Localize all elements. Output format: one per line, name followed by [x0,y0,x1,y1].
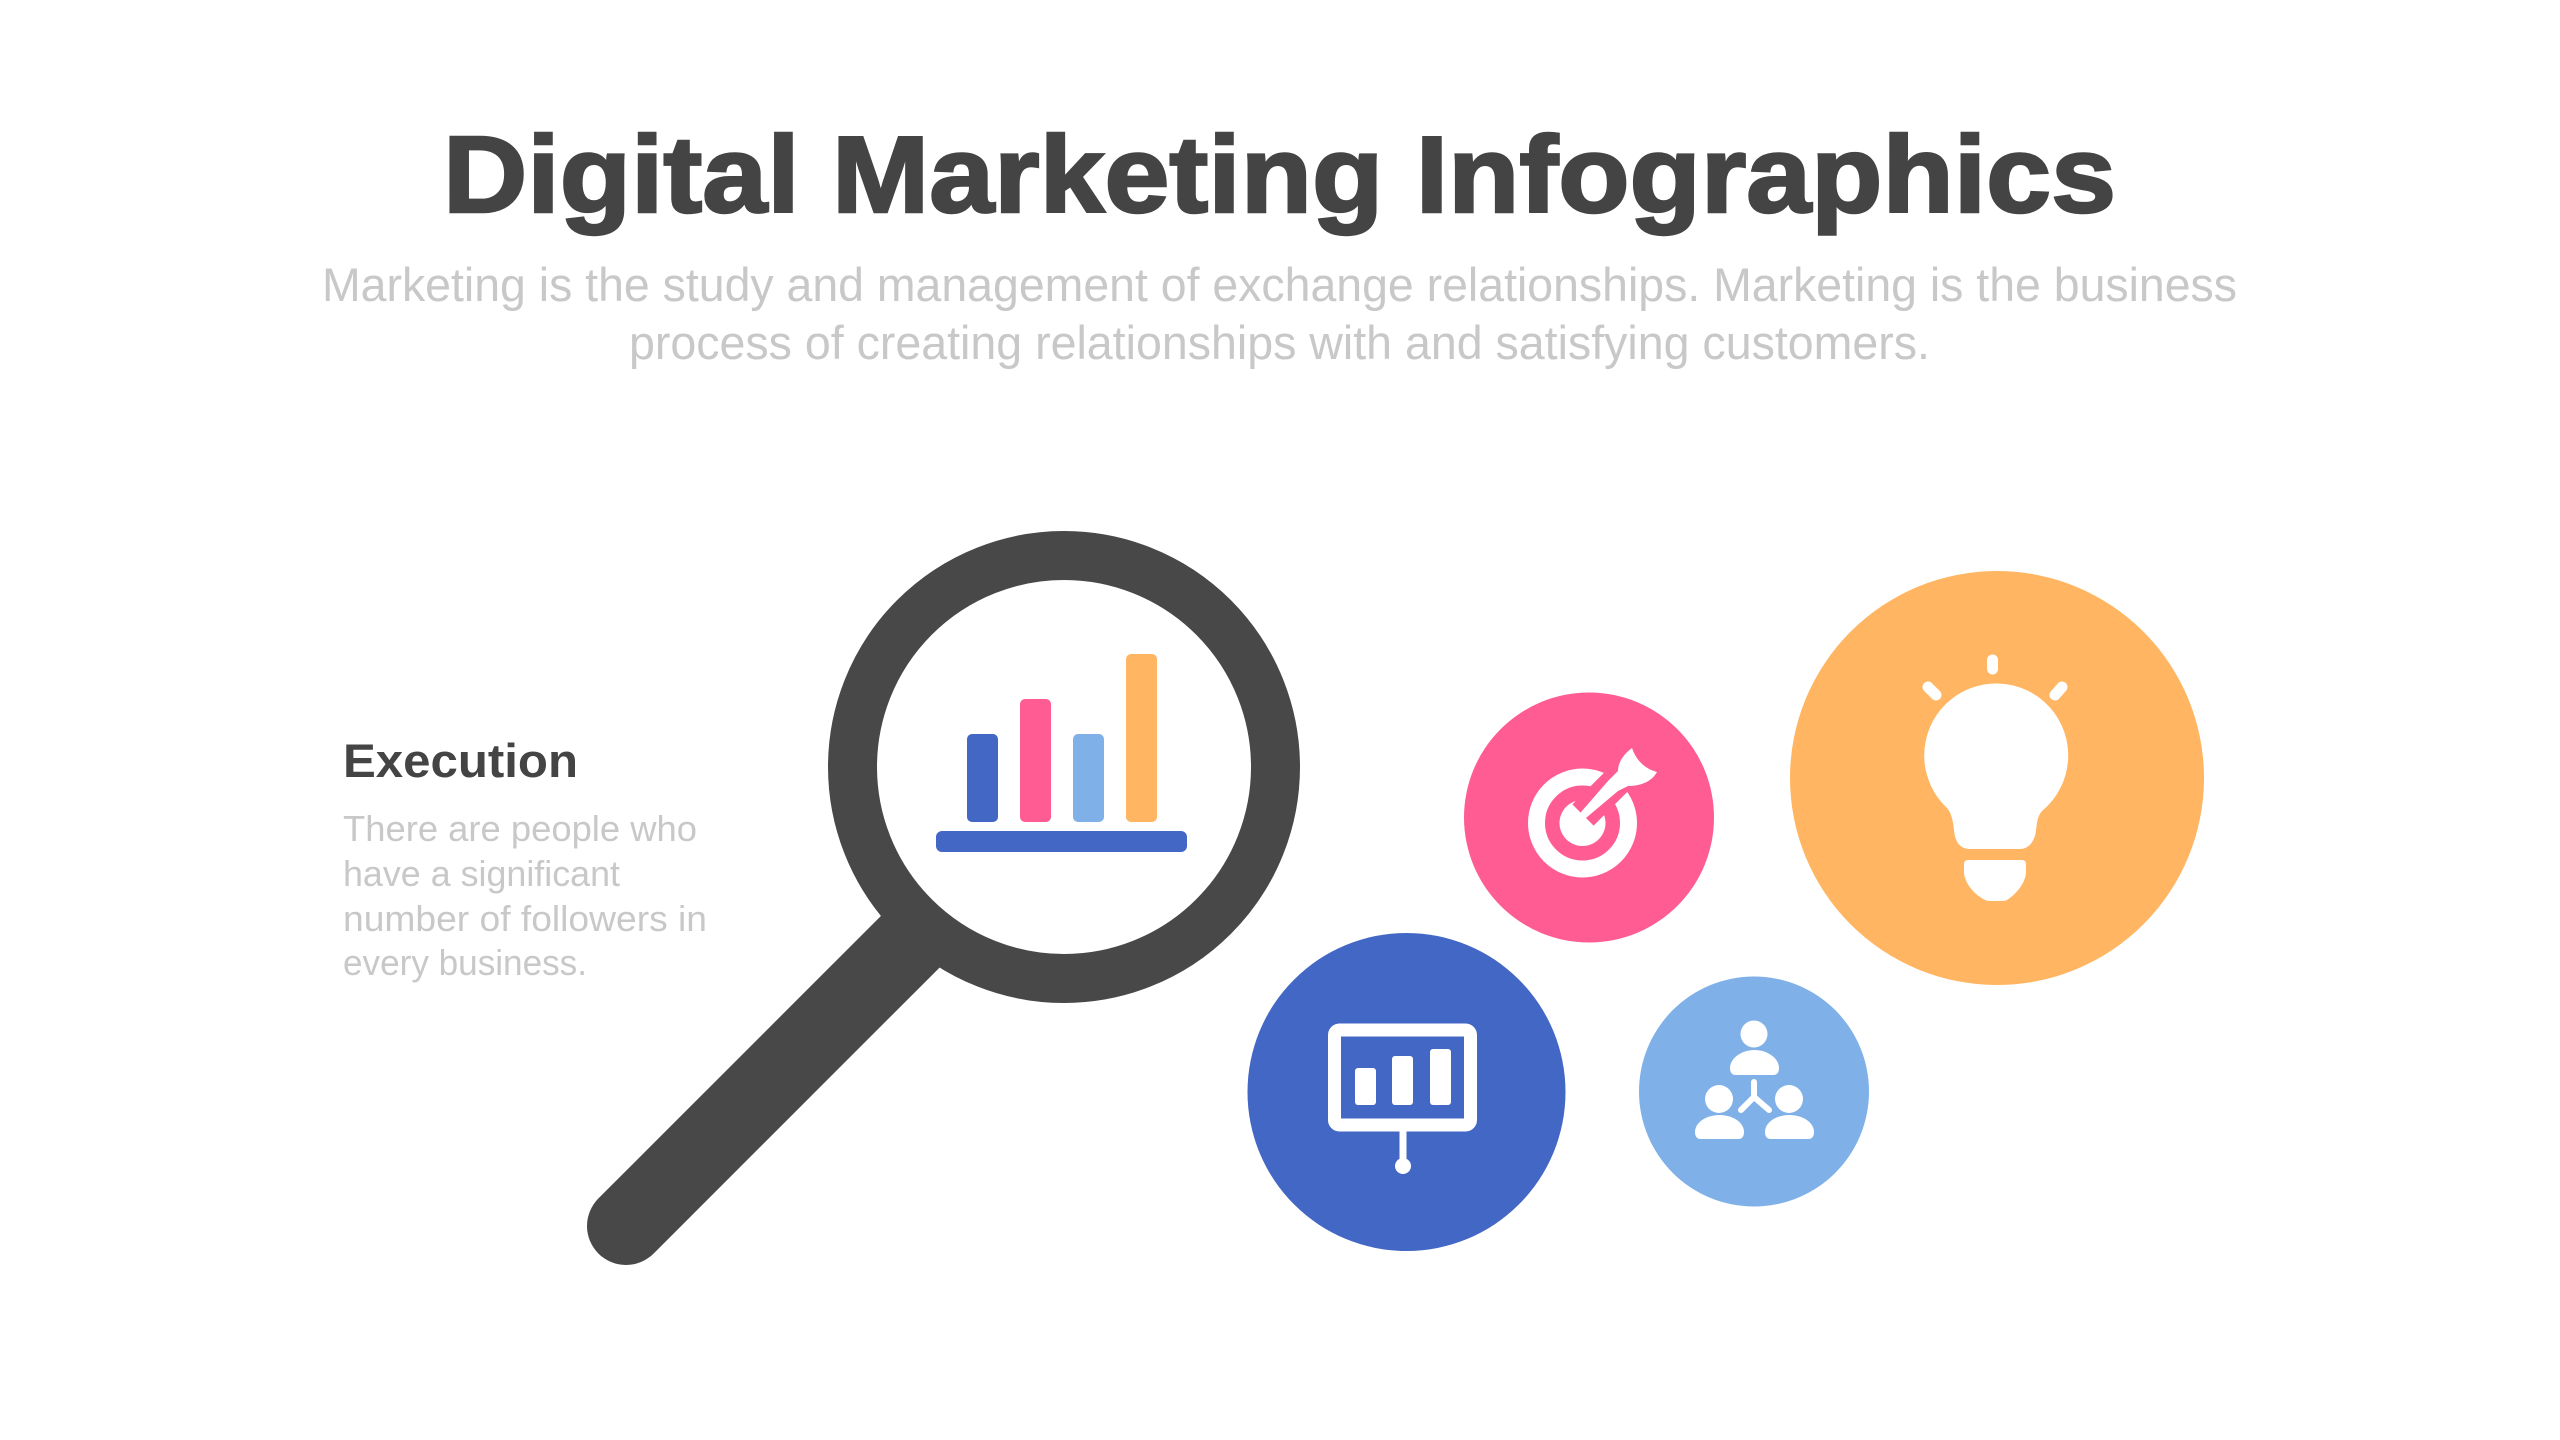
subtitle [322,258,2237,369]
subtitle: process of creating relationships with and satisfying customers. [629,316,1930,369]
body text: There are people who [343,808,697,849]
subtitle: Marketing is the study and management of exchange relationships. Marketing is the business [322,258,2237,311]
heading: Execution: Execution [343,734,578,787]
body text: every business. [343,942,587,983]
body text [343,808,707,983]
light blue circle: team hierarchy icon [1639,976,1869,1206]
title: Digital Marketing Infographics [443,114,2116,236]
blue circle: presentation board icon [1248,933,1566,1251]
orange circle: light bulb icon [1790,571,2204,985]
text block: Execution [343,734,707,983]
body text: have a significant [343,853,620,894]
body text: number of followers in [343,898,707,939]
pink circle: target icon [1464,692,1714,942]
bar chart inside magnifier [936,654,1187,852]
icon: magnifying glass [626,556,1276,1226]
